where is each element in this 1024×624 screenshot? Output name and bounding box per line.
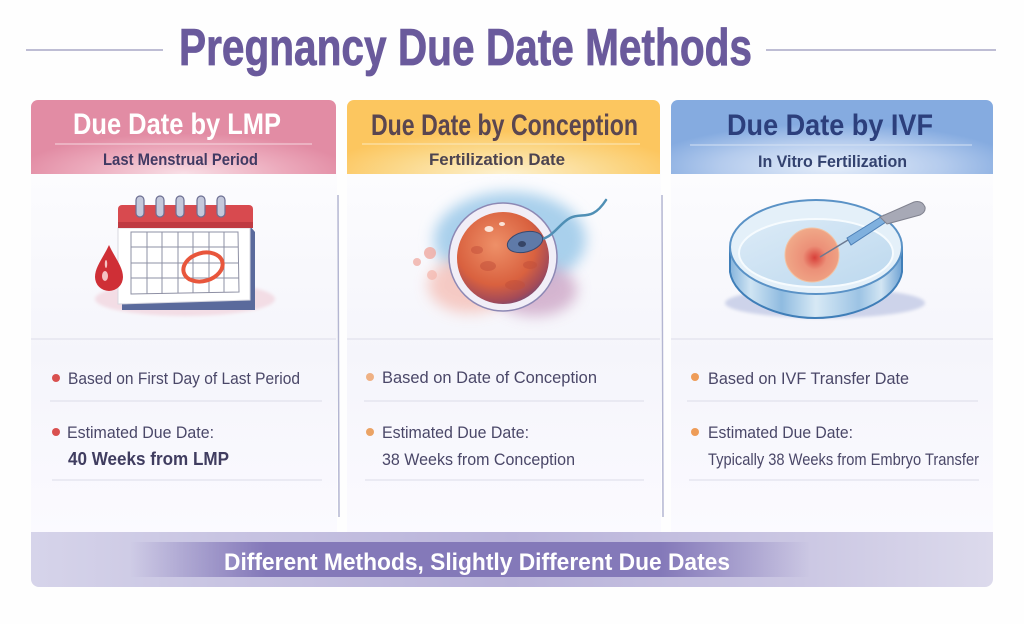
icon: calendar with blood drop [95, 196, 275, 316]
header: conception: Fertilization Date [429, 150, 565, 169]
bullet: conception estimate: Estimated Due Date: [382, 423, 529, 442]
icon: egg and sperm [413, 192, 606, 316]
bullet: conception estimate: 38 Weeks from Conception [382, 450, 575, 469]
bullet: LMP estimate [52, 423, 229, 469]
header: LMP: Last Menstrual Period [103, 150, 258, 169]
panel: due date by LMP [31, 100, 337, 535]
header: conception [347, 100, 660, 174]
title: Pregnancy Due Date Methods [179, 19, 752, 77]
bullet: IVF estimate: Estimated Due Date: [708, 423, 853, 442]
icon: petri dish with pipette [725, 200, 925, 318]
bullet: LMP estimate: Estimated Due Date: [67, 423, 214, 442]
panel: due date by conception [347, 100, 661, 535]
bullet: IVF estimate [691, 423, 979, 469]
header: LMP [31, 100, 336, 174]
header: IVF [671, 100, 993, 174]
bullet: conception basis: Based on Date of Conception [382, 368, 597, 387]
header: IVF: In Vitro Fertilization [758, 152, 907, 171]
bullet: LMP estimate: 40 Weeks from LMP [68, 449, 229, 469]
footer banner: Different Methods, Slightly Different Due Dates [224, 549, 730, 576]
bullet: IVF estimate: Typically 38 Weeks from Embryo Transfer [708, 450, 979, 469]
bullet: conception estimate [366, 423, 575, 469]
header: conception: Due Date by Conception [371, 109, 638, 142]
panel: due date by IVF [671, 100, 993, 535]
header: LMP: Due Date by LMP [73, 108, 281, 141]
bullet: LMP basis: Based on First Day of Last Period [68, 369, 300, 388]
header: IVF: Due Date by IVF [727, 109, 933, 142]
bullet: IVF basis: Based on IVF Transfer Date [708, 369, 909, 388]
footer banner [31, 532, 993, 587]
